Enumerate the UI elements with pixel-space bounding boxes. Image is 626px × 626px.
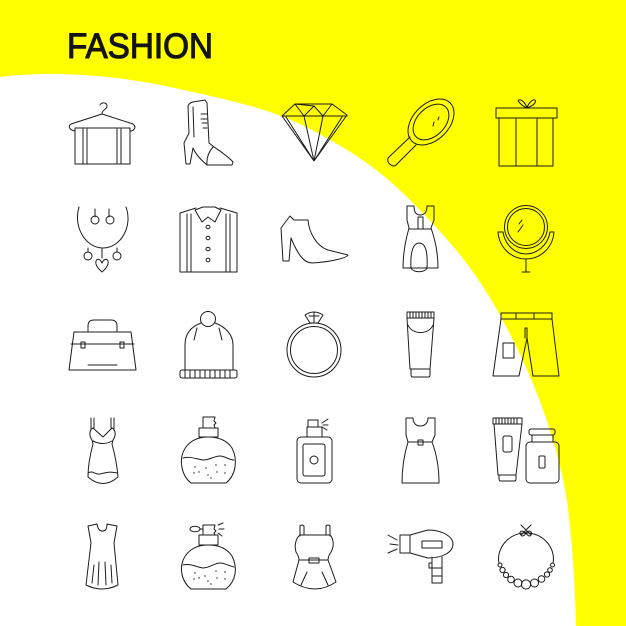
icon: bead necklace: [498, 525, 554, 589]
icon: high boot: [184, 100, 233, 165]
icon: handbag: [69, 320, 136, 370]
icon: shorts: [493, 313, 559, 376]
icon: cream tube: [407, 312, 434, 377]
icon: slip dress: [88, 418, 118, 484]
icon: beanie hat: [180, 312, 237, 378]
icon: necklace with earrings: [77, 207, 128, 272]
icon: hair dryer: [388, 530, 453, 583]
icon: towel on hanger: [69, 103, 135, 164]
icon: dress with apron: [403, 206, 438, 272]
icon: sleeveless dress: [86, 524, 118, 589]
icon: peplum top: [293, 525, 336, 589]
icon: perfume atomizer: [181, 523, 235, 589]
icon: round perfume bottle: [181, 417, 235, 483]
icon: diamond ring: [287, 312, 341, 377]
icon: high heel shoe: [281, 216, 348, 263]
icon: tube and jar: [493, 418, 559, 483]
title: FASHION: [67, 27, 213, 66]
icon: diamond: [282, 104, 347, 161]
icon: shirt: [180, 207, 237, 272]
icon: hand mirror: [388, 90, 463, 166]
icon: gift box: [496, 100, 557, 166]
icon: table mirror: [498, 206, 554, 272]
icon: belted dress: [402, 418, 439, 483]
icon: spray bottle: [297, 419, 332, 483]
